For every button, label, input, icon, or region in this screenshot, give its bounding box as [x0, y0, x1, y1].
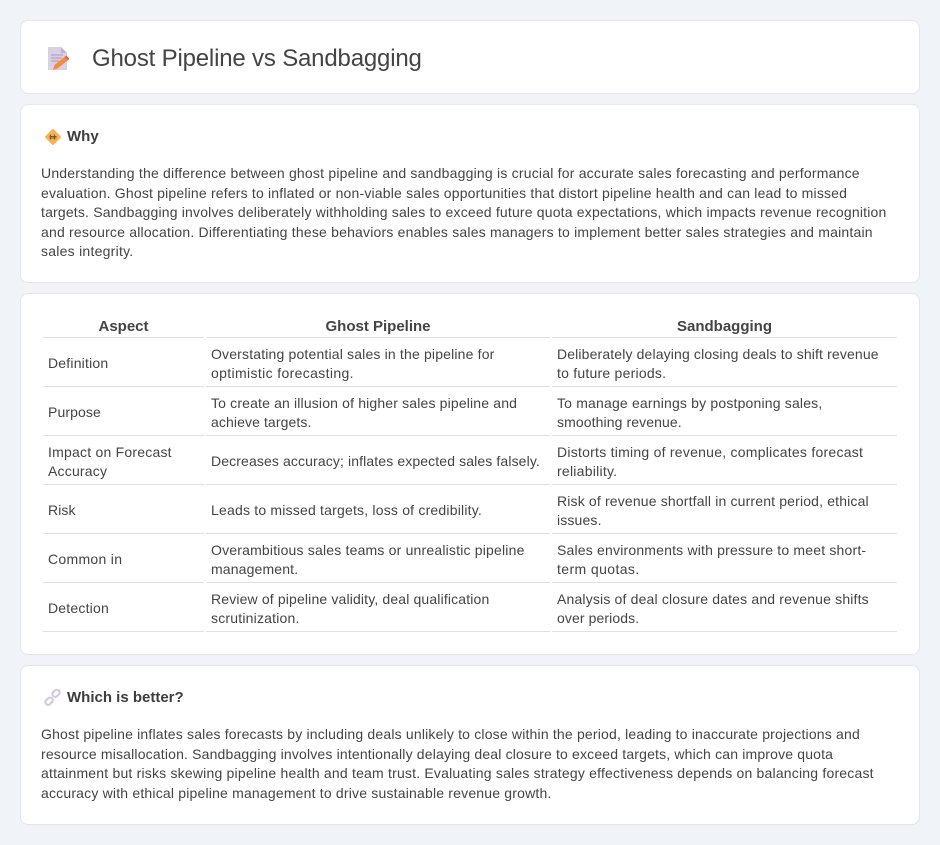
text: why paragraph: sales integrity.	[41, 243, 133, 259]
row: impact on forecast accuracy: reliability.	[557, 463, 617, 479]
title: Ghost Pipeline vs Sandbagging	[92, 45, 422, 72]
row: common in: Overambitious sales teams or unrealistic pipeline	[211, 542, 525, 558]
row: risk: Risk	[48, 502, 76, 518]
panel: comparison table	[20, 293, 920, 655]
row: risk: Risk of revenue shortfall in current period, ethical	[557, 493, 869, 509]
table header: Sandbagging	[677, 318, 772, 335]
heading: which is better: Which is better?	[67, 689, 184, 706]
row: common in: term quotas.	[557, 561, 640, 577]
row: risk: Leads to missed targets, loss of credibility.	[211, 502, 482, 518]
row: detection: scrutinization.	[211, 610, 300, 626]
row: definition: Overstating potential sales in the pipeline for	[211, 346, 494, 362]
row: detection: Detection	[48, 600, 109, 616]
row: definition: Deliberately delaying closing deals to shift revenue	[557, 346, 879, 362]
row: impact on forecast accuracy	[48, 444, 863, 479]
row: detection: Analysis of deal closure dates and revenue shifts	[557, 591, 869, 607]
text: why paragraph	[41, 165, 886, 259]
row: risk: issues.	[557, 512, 602, 528]
text: which is better paragraph: resource misallocation. Sandbagging involves intentionally delaying deal closure to exceed targets, which can improve quota	[41, 746, 833, 762]
panel: which is better	[20, 665, 920, 825]
icon: link	[44, 689, 61, 706]
row: purpose: To manage earnings by postponing sales,	[557, 395, 822, 411]
panel: why	[20, 104, 920, 283]
row: common in: management.	[211, 561, 298, 577]
table header: Aspect	[98, 318, 149, 335]
row: purpose: Purpose	[48, 404, 101, 420]
row: purpose: smoothing revenue.	[557, 414, 682, 430]
text: why paragraph: evaluation. Ghost pipeline refers to inflated or non-viable sales opportunities that distort pipeline health and can lead to missed	[41, 185, 847, 201]
table header: Ghost Pipeline	[325, 318, 430, 335]
row: definition: optimistic forecasting.	[211, 365, 354, 381]
text: why paragraph: and resource allocation. Differentiating these behaviors enables sales managers to implement better sales strategies and maintain	[41, 224, 873, 240]
row: definition: to future periods.	[557, 365, 666, 381]
row: purpose: To create an illusion of higher sales pipeline and	[211, 395, 517, 411]
text: which is better paragraph: Ghost pipeline inflates sales forecasts by including deals unlikely to close within the period, leading to inaccurate projections and	[41, 726, 860, 742]
row: common in	[48, 542, 866, 577]
table header	[98, 318, 772, 335]
text: why paragraph: targets. Sandbagging involves deliberately withholding sales to exceed future quota expectations, which impacts revenue recognition	[41, 204, 886, 220]
icon: construction diamond	[45, 129, 61, 145]
text: which is better paragraph: attainment but risks skewing pipeline health and team trust. Evaluating sales strategy effectiveness depends on balancing forecast	[41, 765, 874, 781]
row: impact on forecast accuracy: Distorts timing of revenue, complicates forecast	[557, 444, 863, 460]
row: impact on forecast accuracy: Decreases accuracy; inflates expected sales falsely.	[211, 453, 540, 469]
panel: header	[20, 20, 920, 94]
icon: document with pencil	[48, 47, 70, 70]
row: purpose	[48, 395, 822, 430]
row: risk	[48, 493, 869, 528]
row: impact on forecast accuracy: Impact on Forecast	[48, 444, 172, 460]
row: detection	[48, 591, 869, 626]
row: detection: Review of pipeline validity, deal qualification	[211, 591, 489, 607]
row: definition	[48, 346, 879, 381]
row: impact on forecast accuracy: Accuracy	[48, 463, 107, 479]
text: which is better paragraph: accuracy with ethical pipeline management to drive sustainable revenue growth.	[41, 785, 552, 801]
row: common in: Common in	[48, 551, 122, 567]
row: purpose: achieve targets.	[211, 414, 311, 430]
row: common in: Sales environments with pressure to meet short-	[557, 542, 866, 558]
row: detection: over periods.	[557, 610, 639, 626]
row: definition: Definition	[48, 355, 108, 371]
heading: why: Why	[67, 128, 99, 145]
text: which is better paragraph	[41, 726, 874, 801]
text: why paragraph: Understanding the difference between ghost pipeline and sandbagging is crucial for accurate sales forecasting and performance	[41, 165, 860, 181]
